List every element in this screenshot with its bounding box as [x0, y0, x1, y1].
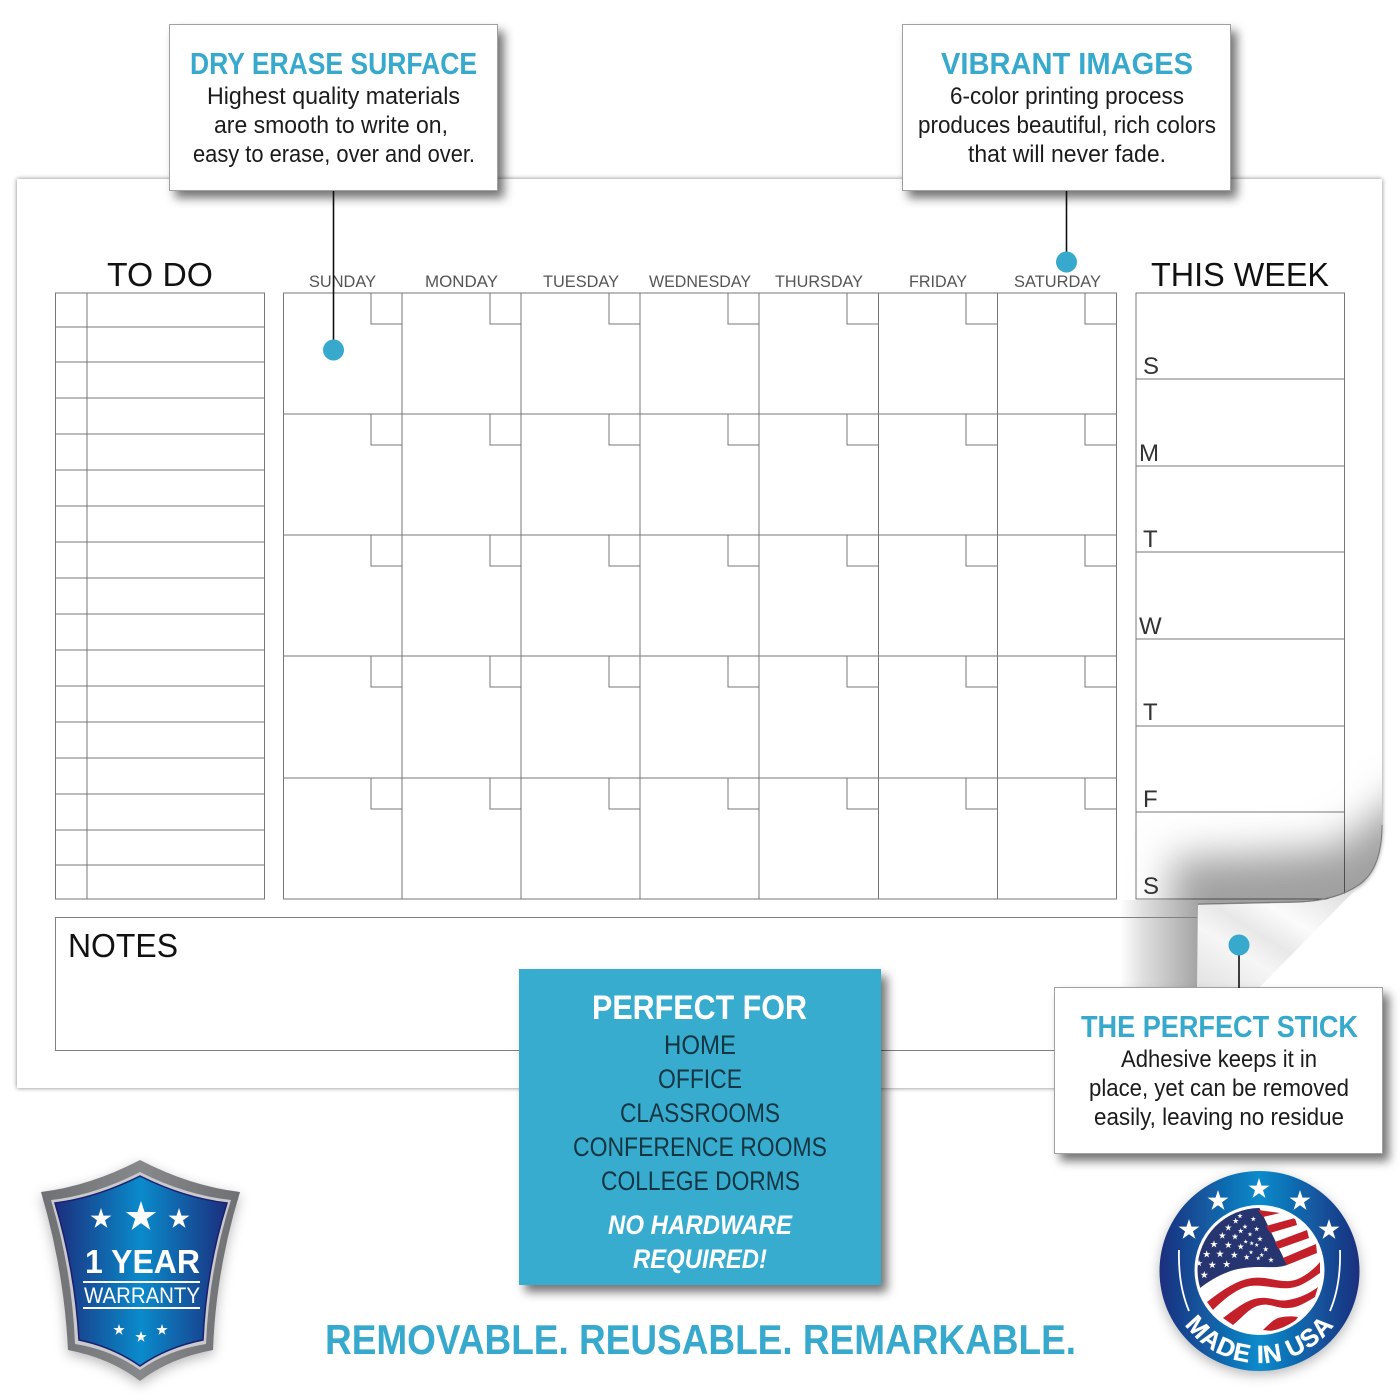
curl shading	[1126, 780, 1382, 987]
heading: this week: THIS WEEK	[1151, 256, 1329, 293]
callout: dry erase surface: easy to erase, over and over.	[193, 141, 475, 168]
date boxes	[371, 292, 1116, 809]
pointer: vibrant images	[1056, 191, 1077, 272]
curl edge	[1198, 825, 1382, 904]
badge: 1 year warranty: WARRANTY	[84, 1283, 200, 1308]
flag	[1198, 1208, 1320, 1331]
callout: dry erase surface: Highest quality materials	[207, 83, 460, 110]
pointer: the perfect stick	[1228, 934, 1250, 988]
callout: vibrant images: produces beautiful, rich colors	[918, 112, 1216, 139]
day letters: M	[1139, 440, 1159, 467]
day letters: S	[1143, 353, 1159, 380]
weekday labels: WEDNESDAY	[649, 273, 751, 291]
panel: perfect for: CONFERENCE ROOMS	[573, 1132, 827, 1162]
callout: vibrant images: VIBRANT IMAGES	[941, 46, 1193, 81]
panel: perfect for: NO HARDWARE	[608, 1210, 793, 1240]
day letters: T	[1143, 699, 1158, 726]
weekday labels: THURSDAY	[775, 273, 863, 291]
heading: to do: TO DO	[107, 256, 213, 293]
day letters	[1139, 353, 1162, 900]
panel: to do list	[55, 256, 264, 899]
callout: the perfect stick: Adhesive keeps it in	[1121, 1046, 1317, 1073]
weekday labels: SATURDAY	[1014, 273, 1101, 291]
panel: perfect for: COLLEGE DORMS	[601, 1166, 800, 1196]
callout: dry erase surface: DRY ERASE SURFACE	[190, 46, 477, 81]
badge text: MADE IN USA	[1185, 1314, 1334, 1364]
panel: monthly calendar grid	[283, 273, 1117, 899]
day letters: W	[1139, 613, 1162, 640]
callout: the perfect stick: place, yet can be removed	[1089, 1075, 1349, 1102]
callout: vibrant images	[902, 24, 1230, 190]
weekday labels: FRIDAY	[909, 273, 967, 291]
day letters: F	[1143, 786, 1158, 813]
peeled corner flap	[1197, 885, 1360, 987]
panel: calendar sheet	[17, 179, 1400, 1090]
pointer: dry erase surface	[323, 191, 344, 360]
day letters: S	[1143, 873, 1159, 900]
panel: perfect for: REQUIRED!	[633, 1244, 767, 1274]
panel: this week	[1136, 256, 1344, 900]
weekday labels: TUESDAY	[543, 273, 619, 291]
panel: notes	[56, 918, 1197, 1050]
badge: made in usa	[1152, 1168, 1366, 1382]
tagline: REMOVABLE. REUSABLE. REMARKABLE.	[325, 1316, 1076, 1363]
callout: the perfect stick	[1054, 988, 1382, 1154]
panel: perfect for: OFFICE	[658, 1064, 742, 1094]
panel: perfect for: PERFECT FOR	[592, 989, 807, 1027]
badge: 1 year warranty: 1 YEAR	[85, 1243, 200, 1280]
callout: the perfect stick: easily, leaving no residue	[1094, 1104, 1344, 1131]
ring stars	[1179, 1178, 1339, 1239]
callout: vibrant images: that will never fade.	[968, 141, 1166, 168]
panel: perfect for	[519, 969, 881, 1285]
weekday labels: SUNDAY	[309, 273, 376, 291]
panel: perfect for: HOME	[664, 1030, 736, 1060]
weekday labels: MONDAY	[425, 273, 498, 291]
callout: dry erase surface: are smooth to write on,	[214, 112, 448, 139]
callout: dry erase surface	[170, 24, 498, 190]
callout: the perfect stick: THE PERFECT STICK	[1081, 1009, 1359, 1044]
day letters: T	[1143, 526, 1158, 553]
weekday labels	[309, 273, 1101, 291]
heading: notes: NOTES	[68, 927, 178, 964]
callout: vibrant images: 6-color printing process	[950, 83, 1184, 110]
badge: 1 year warranty	[41, 1160, 240, 1381]
panel: perfect for: CLASSROOMS	[620, 1098, 780, 1128]
